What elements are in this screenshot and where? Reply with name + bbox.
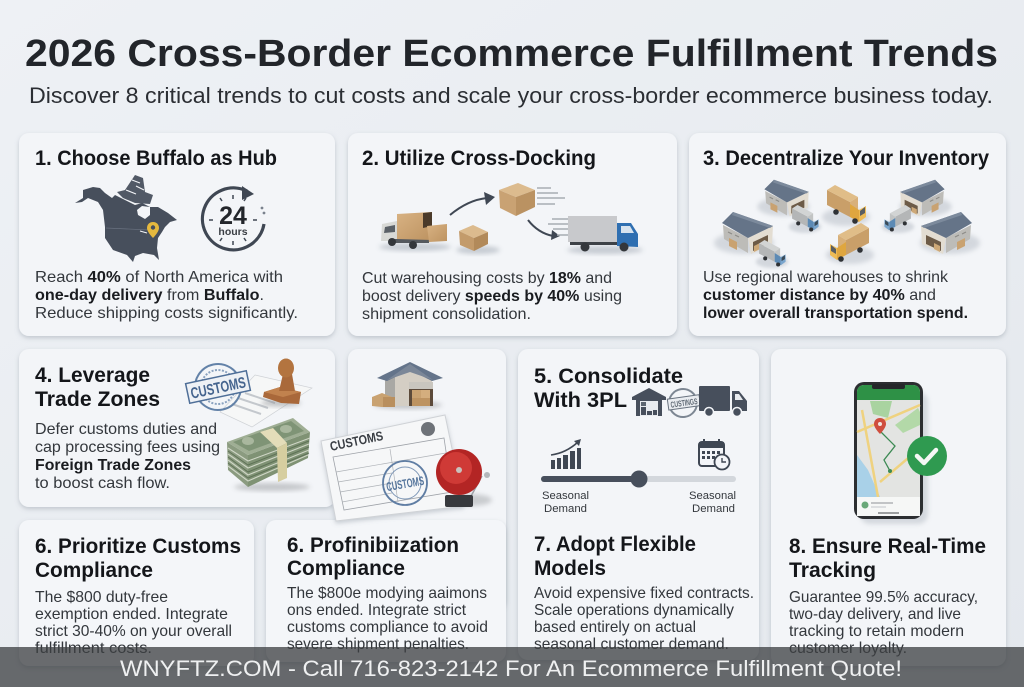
slider: seasonal demand <box>541 470 736 515</box>
illustration: cross-docking trucks and boxes <box>379 183 643 254</box>
heading: prioritize customs: 6. Prioritize Customs <box>35 535 241 558</box>
body text: card 4 <box>35 421 220 492</box>
panel: 8 real-time tracking <box>771 349 1006 666</box>
panel: 6 prioritize customs compliance <box>19 520 254 666</box>
illustration: paper and wooden stamp <box>220 358 312 427</box>
heading: flexible models: Models <box>534 557 606 580</box>
body text: card 8 <box>789 589 978 657</box>
panel: illustration column behind trade zones <box>348 349 506 609</box>
icon: delivery truck glyph <box>699 386 747 416</box>
heading: consolidate with 3PL <box>534 365 683 412</box>
panel: 2 cross-docking <box>348 133 677 336</box>
body text: duplicate compliance card: customs compliance to avoid <box>287 619 488 636</box>
body text: card 7 <box>534 585 754 653</box>
heading: profinibiization compliance <box>287 534 459 580</box>
illustration: customs form with stamp: CUSTOMS <box>385 474 425 494</box>
body text: card 1: one-day delivery from Buffalo. <box>35 287 264 304</box>
body text: card 7: based entirely on actual <box>534 619 696 636</box>
icon: calendar with clock <box>699 439 730 470</box>
body text: card 6: fulfillment costs. <box>35 640 152 657</box>
body text: card 6: The $800 duty-free <box>35 589 168 606</box>
heading: real-time tracking <box>789 535 986 582</box>
body text: card 2: Cut warehousing costs by 18% and <box>362 270 612 287</box>
body text: card 8: tracking to retain modern <box>789 623 964 640</box>
slider: seasonal demand: Seasonal <box>542 490 589 502</box>
body text: duplicate compliance card <box>287 585 488 653</box>
body text: duplicate compliance card: severe shipment penalties. <box>287 636 469 653</box>
icon: rising bar chart <box>551 439 581 469</box>
body text: card 4: cap processing fees using <box>35 439 220 456</box>
heading: real-time tracking: 8. Ensure Real-Time <box>789 535 986 558</box>
slider: seasonal demand: Seasonal <box>689 490 736 502</box>
icon: red alarm bell <box>436 449 492 507</box>
heading: prioritize customs: Compliance <box>35 559 153 582</box>
heading: real-time tracking: Tracking <box>789 559 876 582</box>
heading: consolidate with 3PL: 5. Consolidate <box>534 365 683 388</box>
body text: card 4: Defer customs duties and <box>35 421 217 438</box>
body text: duplicate compliance card: ons ended. Integrate strict <box>287 602 467 619</box>
body text: card 2 <box>362 270 622 323</box>
body text: card 1: Reach 40% of North America with <box>35 269 283 286</box>
panel: 5 and 7 consolidate and flexible models <box>518 349 759 660</box>
footer banner <box>0 647 1024 687</box>
body text: duplicate compliance card: The $800e modying aaimons <box>287 585 487 602</box>
icon: customs stamp glyph: CUSTINGS <box>670 396 698 410</box>
heading: choose Buffalo: 1. Choose Buffalo as Hub <box>35 147 277 170</box>
heading: decentralize: 3. Decentralize Your Inventory <box>703 147 989 170</box>
icon: stack of cash <box>227 418 310 491</box>
heading: profinibiization compliance: Compliance <box>287 557 405 580</box>
illustration: customs form with stamp <box>321 415 464 521</box>
icon: North America map with pin <box>75 175 177 262</box>
subtitle: Discover 8 critical trends to cut costs and scale your cross-border ecommerce business today. <box>29 83 993 108</box>
body text: card 3: customer distance by 40% and <box>703 287 936 304</box>
body text: card 4: to boost cash flow. <box>35 475 170 492</box>
body text: card 8: customer loyalty. <box>789 640 907 657</box>
footer call to action: WNYFTZ.COM - Call 716-823-2142 For An Ecommerce Fulfillment Quote! <box>120 656 902 681</box>
icon: customs round stamp <box>183 358 253 416</box>
body text: card 3 <box>703 269 968 322</box>
body text: card 1 <box>35 269 298 322</box>
body text: card 8: two-day delivery, and live <box>789 606 961 623</box>
illustration: warehouses and trucks <box>714 180 980 268</box>
body text: card 4: Foreign Trade Zones <box>35 457 191 474</box>
icon: warehouse glyph <box>632 388 666 416</box>
icon: customs stamp glyph <box>666 387 702 419</box>
body text: card 1: Reduce shipping costs significantly. <box>35 305 298 322</box>
icon: 24 hours clock: 24 <box>219 202 247 230</box>
slider: seasonal demand: Demand <box>692 503 735 515</box>
panel: 1 choose Buffalo as hub <box>19 133 335 336</box>
body text: card 6: exemption ended. Integrate <box>35 606 228 623</box>
heading: trade zones: Trade Zones <box>35 388 160 411</box>
heading: profinibiization compliance: 6. Profinibiization <box>287 534 459 557</box>
panel: 6 duplicate compliance card <box>266 520 506 662</box>
heading: consolidate with 3PL: With 3PL <box>534 389 627 412</box>
panel: 3 decentralize inventory <box>689 133 1006 336</box>
body text: card 3: Use regional warehouses to shrink <box>703 269 949 286</box>
body text: card 2: shipment consolidation. <box>362 306 531 323</box>
body text: card 7: Avoid expensive fixed contracts. <box>534 585 754 602</box>
body text: card 7: Scale operations dynamically <box>534 602 734 619</box>
body text: card 6 <box>35 589 232 657</box>
heading: trade zones <box>35 364 160 411</box>
illustration: customs form with stamp: CUSTOMS <box>329 428 385 454</box>
icon: 24 hours clock <box>202 186 265 250</box>
heading: flexible models: 7. Adopt Flexible <box>534 533 696 556</box>
heading: prioritize customs <box>35 535 241 582</box>
body text: card 8: Guarantee 99.5% accuracy, <box>789 589 978 606</box>
icon: 24 hours clock: hours <box>218 226 248 238</box>
body text: card 6: strict 30-40% on your overall <box>35 623 232 640</box>
panel: 4 leverage trade zones <box>19 349 335 507</box>
heading: flexible models <box>534 533 696 580</box>
slider: seasonal demand: Demand <box>544 503 587 515</box>
icon: customs round stamp: CUSTOMS <box>189 374 247 403</box>
heading: trade zones: 4. Leverage <box>35 364 150 387</box>
body text: card 3: lower overall transportation spend. <box>703 305 968 322</box>
title: 2026 Cross-Border Ecommerce Fulfillment Trends <box>25 33 998 75</box>
heading: cross-docking: 2. Utilize Cross-Docking <box>362 147 596 170</box>
icon: warehouse with boxes <box>372 362 443 409</box>
body text: card 7: seasonal customer demand. <box>534 636 729 653</box>
icon: phone with map and check <box>854 382 947 524</box>
body text: card 2: boost delivery speeds by 40% using <box>362 288 622 305</box>
